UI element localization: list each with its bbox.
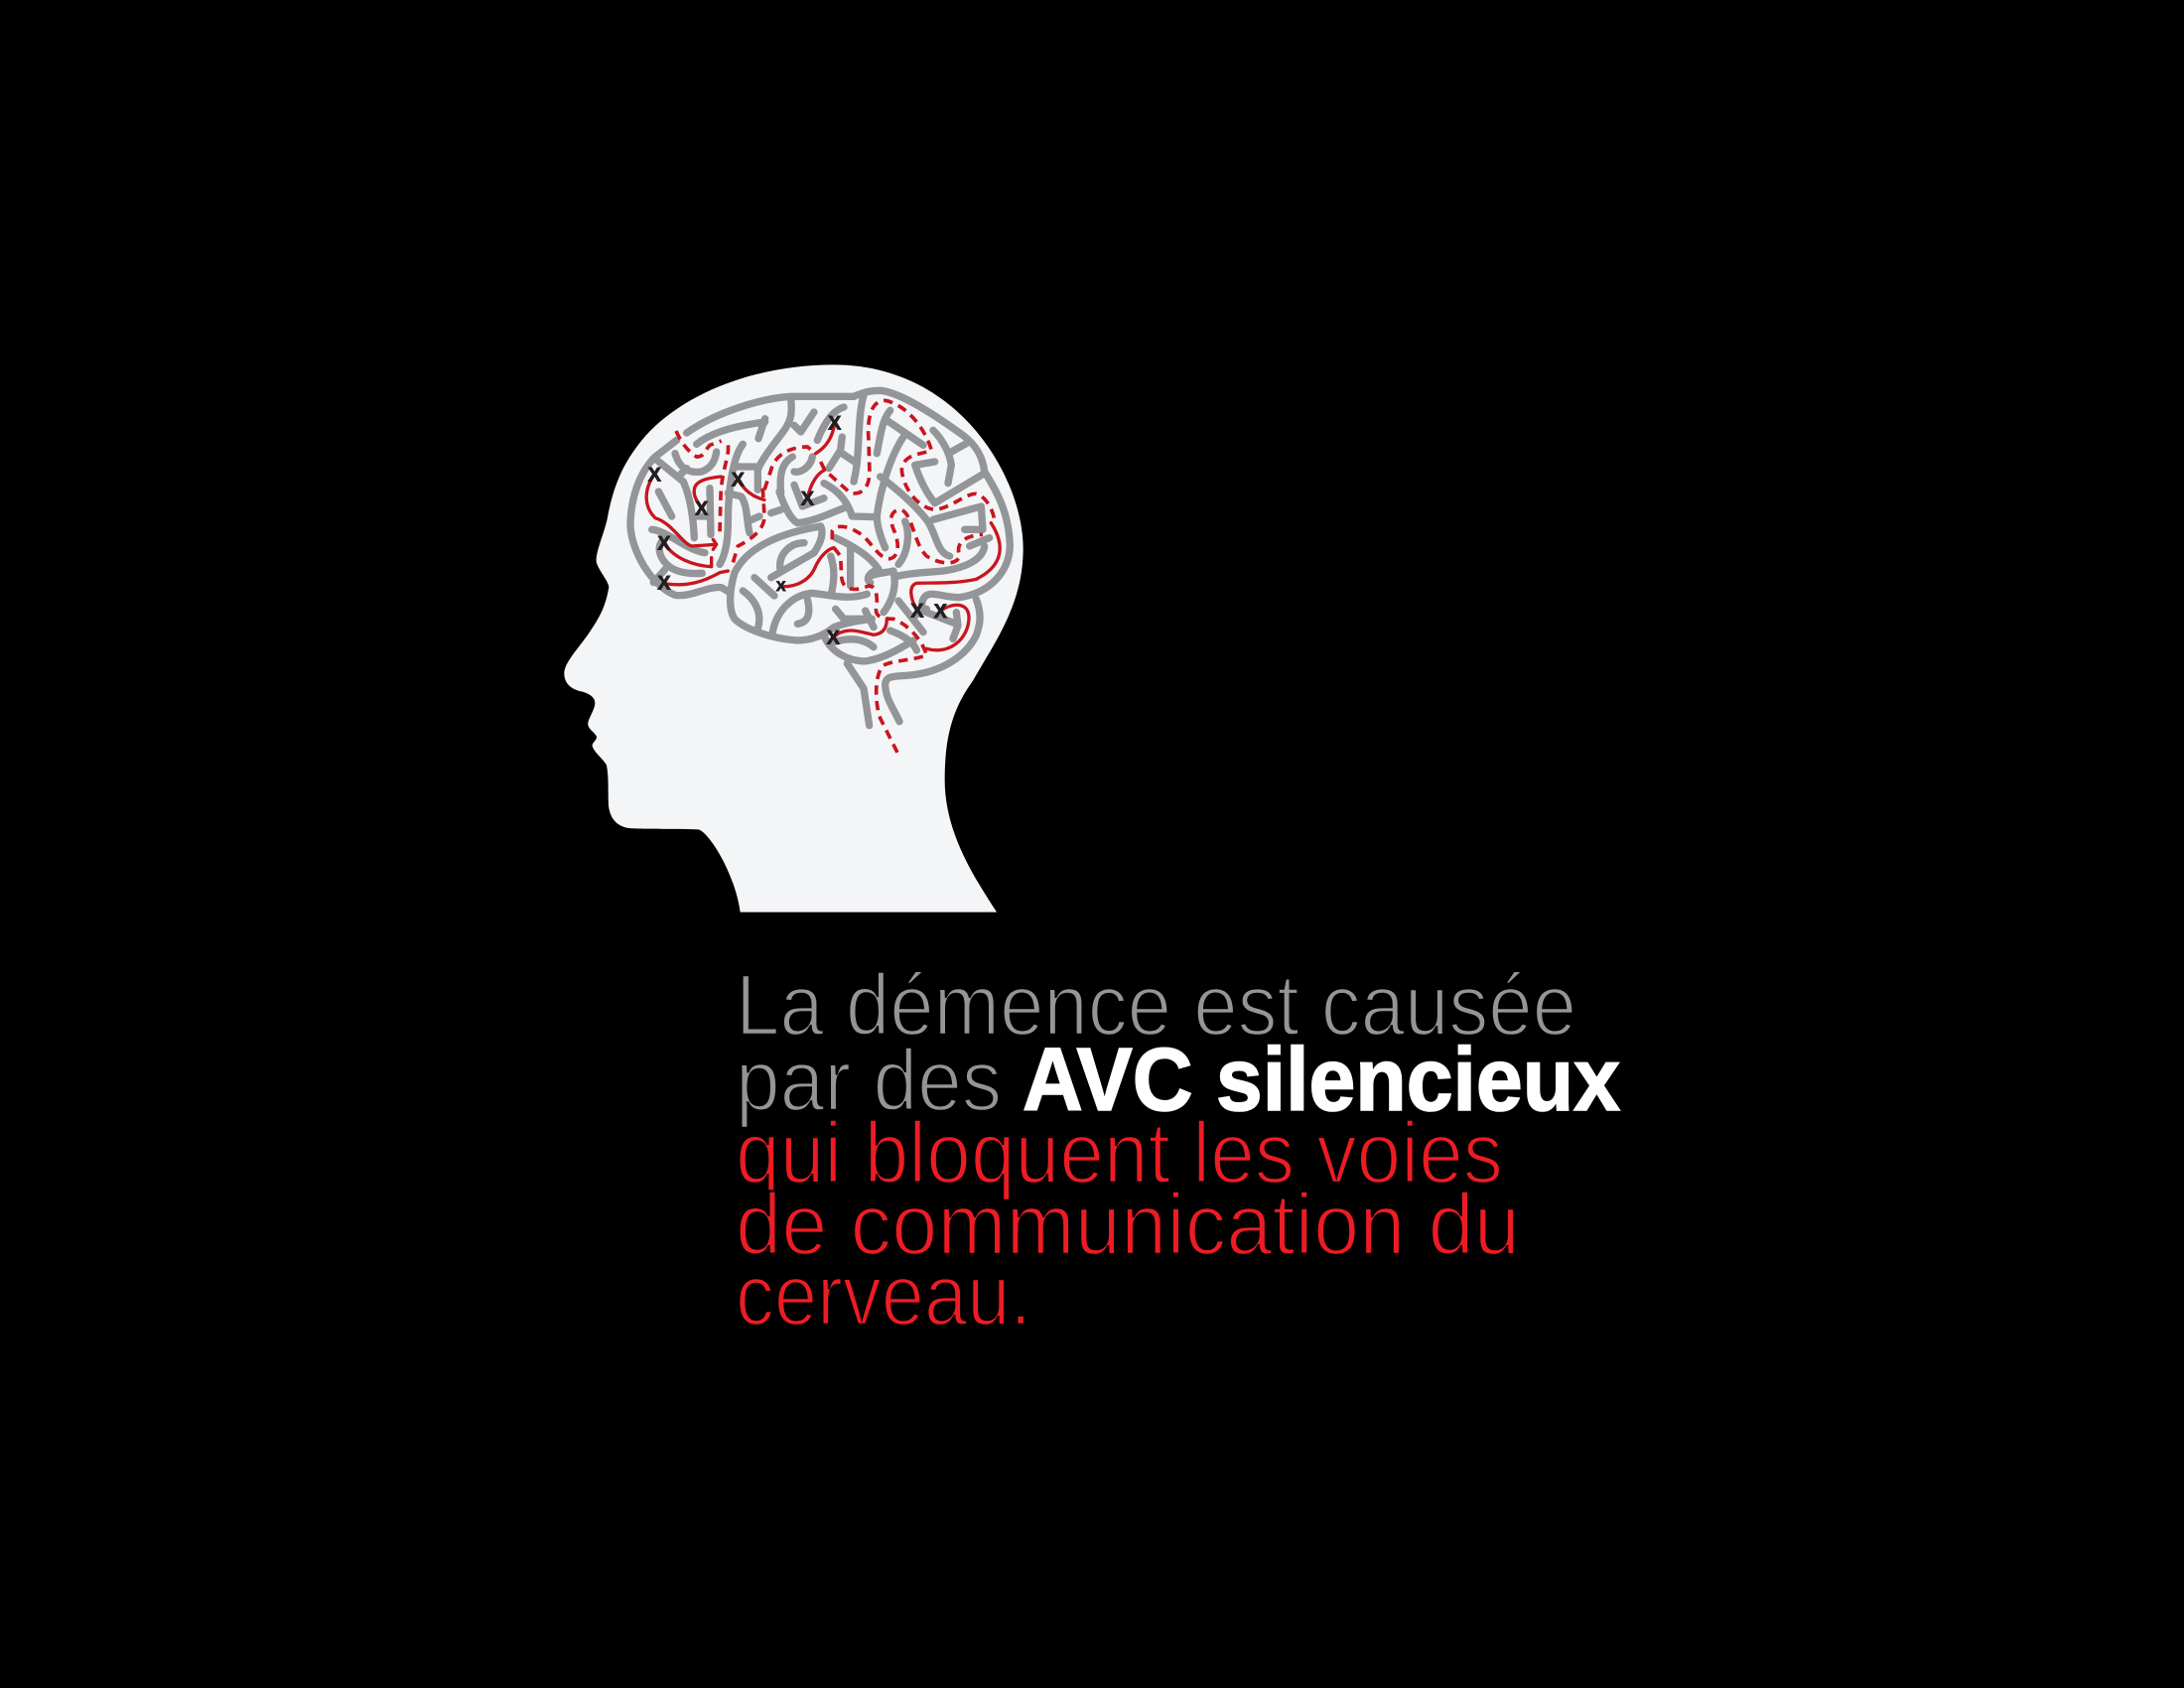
blockage x marks	[648, 414, 947, 649]
blockage x marks: X	[934, 602, 947, 623]
blockage x marks: X	[776, 578, 786, 594]
brain illustration	[630, 390, 1010, 755]
blockage x marks: X	[658, 574, 671, 595]
blockage x marks: X	[648, 465, 661, 486]
gray brain folds	[630, 390, 1010, 726]
line 2 emphasis: AVC silencieux	[1023, 1031, 1620, 1130]
line 4: de communication du	[736, 1177, 1520, 1273]
dashed red pathways	[676, 400, 995, 755]
solid red pathways	[646, 424, 1000, 650]
blockage x marks: X	[658, 534, 671, 555]
line 1: La démence est causée	[736, 957, 1576, 1054]
line 3: qui bloquent les voies	[736, 1105, 1503, 1201]
blockage x marks: X	[827, 629, 840, 649]
head silhouette	[564, 364, 1024, 913]
line 5: cerveau.	[736, 1247, 1031, 1343]
blockage x marks: X	[695, 499, 708, 520]
blockage x marks: X	[801, 490, 814, 510]
blockage x marks: X	[911, 601, 924, 622]
line 2 lead-in: par des	[736, 1033, 1002, 1129]
headline text	[736, 957, 1620, 1343]
blockage x marks: X	[828, 414, 841, 435]
blockage x marks: X	[732, 470, 745, 491]
